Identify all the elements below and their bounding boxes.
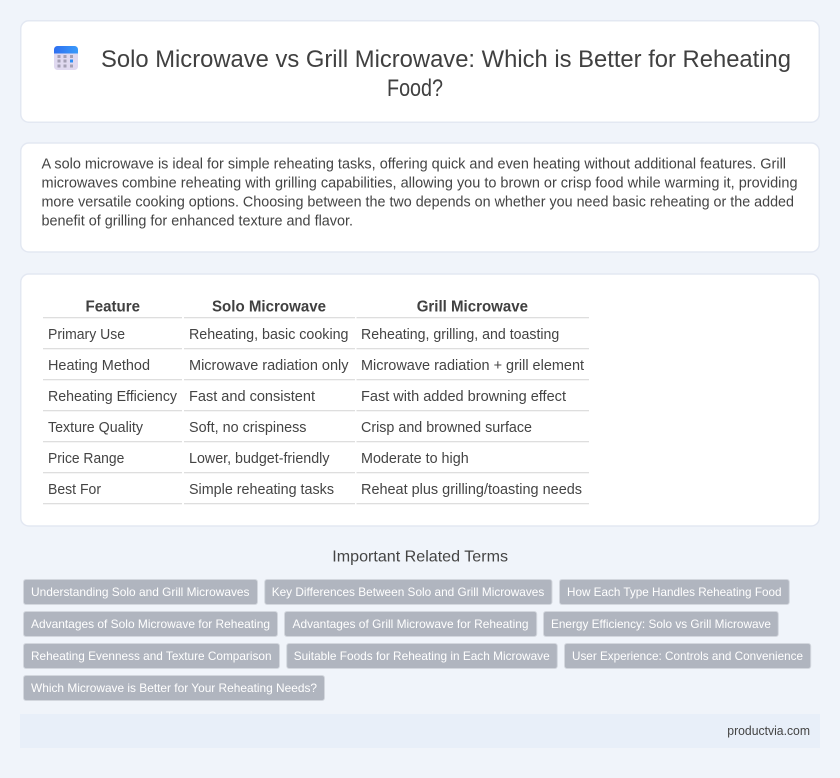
table row: price range [48,451,469,467]
table row: texture quality: Crisp and browned surface [361,420,532,436]
panel: related term tags [24,580,811,700]
footer source text: productvia.com [727,724,810,738]
text block: summary: benefit of grilling for enhanced texture and flavor. [42,214,353,230]
title: Food? [387,75,443,102]
table row: reheating efficiency: Reheating Efficiency [48,389,178,405]
table row: reheating efficiency: Fast and consistent [189,389,315,405]
tag [287,644,557,668]
table row: best for: Best For [48,482,101,498]
table row: primary use: Reheating, grilling, and toasting [361,327,559,343]
table header row: Solo Microwave [212,298,326,316]
tag: Energy Efficiency: Solo vs Grill Microwave [551,617,771,631]
table row: heating method: Heating Method [48,358,150,374]
table row: reheating efficiency: Fast with added browning effect [361,389,566,405]
heading: related terms: Important Related Terms [332,549,508,566]
tag [24,580,258,604]
panel: title header [21,21,819,122]
tag [564,644,811,668]
table row: best for [48,482,582,498]
tag [265,580,552,604]
tag [24,644,280,668]
tag [24,676,324,700]
tag: Understanding Solo and Grill Microwaves [31,585,250,599]
title [101,46,791,102]
table row: texture quality: Texture Quality [48,420,144,436]
panel: summary paragraph [21,143,819,252]
tag: Advantages of Solo Microwave for Reheating [31,617,270,631]
footer [20,714,820,748]
tag: Key Differences Between Solo and Grill Microwaves [272,585,544,599]
panel: comparison table [21,274,819,526]
table header row [86,298,528,316]
text block: summary: more versatile cooking options. Choosing between the two depends on whether you need basic reheating or the added [42,194,794,210]
table row: price range: Moderate to high [361,451,469,467]
text block: summary: microwaves combine reheating with grilling capabilities, allowing you to brown or crisp food while warming it, providing [42,176,798,192]
table header row: Feature [86,298,140,316]
tag: Advantages of Grill Microwave for Reheating [292,617,528,631]
table row: texture quality: Soft, no crispiness [189,420,306,436]
table row: heating method: Microwave radiation only [189,358,349,374]
title: Solo Microwave vs Grill Microwave: Which is Better for Reheating [101,46,791,73]
tag [560,580,789,604]
tag [284,612,537,636]
table row: price range: Lower, budget-friendly [189,451,330,467]
tag: User Experience: Controls and Convenience [572,649,803,663]
table row: heating method: Microwave radiation + grill element [361,358,584,374]
table row: reheating efficiency [48,389,566,405]
tag [24,612,278,636]
text block: summary: A solo microwave is ideal for simple reheating tasks, offering quick and even heating without additional features. Grill [42,156,786,172]
table row: primary use: Primary Use [48,327,125,343]
table row: primary use: Reheating, basic cooking [189,327,348,343]
tag: Reheating Evenness and Texture Comparison [31,649,272,663]
table header row: Grill Microwave [417,298,528,316]
icon: calendar [54,46,78,70]
table row: price range: Price Range [48,451,124,467]
table row: best for: Reheat plus grilling/toasting needs [361,482,582,498]
table row: primary use [48,327,559,343]
text block: summary [42,156,798,230]
table row: heating method [48,358,584,374]
tag: How Each Type Handles Reheating Food [567,585,782,599]
table row: best for: Simple reheating tasks [189,482,334,498]
table row: texture quality [48,420,532,436]
tag: Suitable Foods for Reheating in Each Microwave [294,649,550,663]
tag [544,612,778,636]
tag: Which Microwave is Better for Your Reheating Needs? [31,681,317,695]
